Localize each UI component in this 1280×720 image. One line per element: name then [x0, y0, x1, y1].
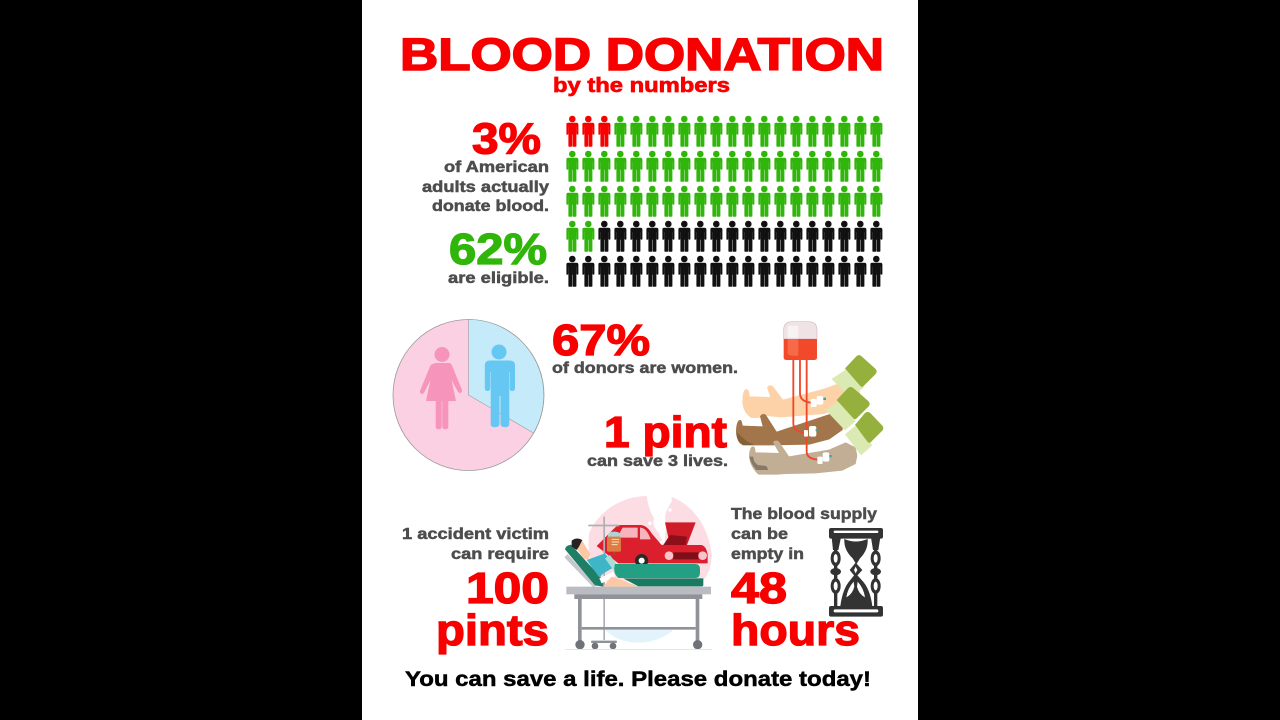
stat: 3 percent donate: of American [444, 159, 549, 176]
stat: blood supply: hours [731, 606, 860, 655]
stat: 67 percent women: of donors are women. [552, 360, 738, 377]
illustration: blood bag and three arms [736, 322, 883, 475]
tubes and cannulas [793, 358, 818, 460]
bottom arm [749, 412, 883, 475]
row 3 [566, 186, 882, 217]
stat: accident victim: pints [436, 606, 549, 655]
blood bag [784, 322, 817, 360]
stat: 67 percent women [552, 316, 738, 377]
icon: man [485, 344, 515, 427]
stat: accident victim: 100 [466, 564, 549, 613]
stat: 3 percent donate [422, 114, 549, 215]
bed frame [565, 587, 712, 650]
top arm [742, 355, 877, 418]
columns [830, 537, 881, 607]
stat: 62 percent eligible: are eligible. [448, 270, 549, 287]
pie chart: donors by gender [393, 320, 544, 470]
glass and sand [844, 539, 868, 564]
IV stand and bag [588, 517, 621, 640]
stat: 3 percent donate: 3% [472, 114, 541, 164]
pictogram chart: 100 people [566, 116, 882, 287]
icon: woman [420, 347, 462, 429]
stat: accident victim [402, 526, 549, 655]
stat: 1 pint saves 3 lives: can save 3 lives. [587, 453, 728, 470]
stat: blood supply: 48 [731, 564, 787, 613]
stat: blood supply [731, 506, 877, 655]
stat: 3 percent donate: adults actually [422, 179, 549, 196]
icon: hourglass [829, 528, 883, 617]
row 2 [566, 151, 882, 182]
patient and bed back [564, 538, 703, 587]
stat: 1 pint saves 3 lives: 1 pint [604, 408, 727, 457]
title: BLOOD DONATION [400, 29, 884, 80]
row 4 [566, 221, 882, 252]
stat: accident victim: can require [451, 546, 549, 563]
middle arm [736, 387, 870, 445]
stat: blood supply: empty in [731, 546, 804, 563]
row 5 [566, 256, 882, 287]
illustration: accident victim on hospital bed [564, 495, 712, 650]
car [597, 522, 708, 567]
title [400, 29, 884, 97]
plates [829, 528, 883, 539]
stat: blood supply: can be [731, 526, 788, 543]
background circles [588, 495, 712, 643]
stat: 67 percent women: 67% [552, 316, 650, 365]
stat: 62 percent eligible [448, 225, 549, 287]
call to action: You can save a life. Please donate today! [405, 667, 871, 691]
row 1 [566, 116, 882, 147]
stat: 3 percent donate: donate blood. [432, 198, 549, 215]
stat: blood supply: The blood supply [731, 506, 877, 523]
stat: 62 percent eligible: 62% [449, 225, 547, 274]
white poster page [362, 0, 918, 720]
stat: 1 pint saves 3 lives [587, 408, 728, 470]
title: by the numbers [553, 75, 730, 97]
stat: accident victim: 1 accident victim [402, 526, 549, 543]
